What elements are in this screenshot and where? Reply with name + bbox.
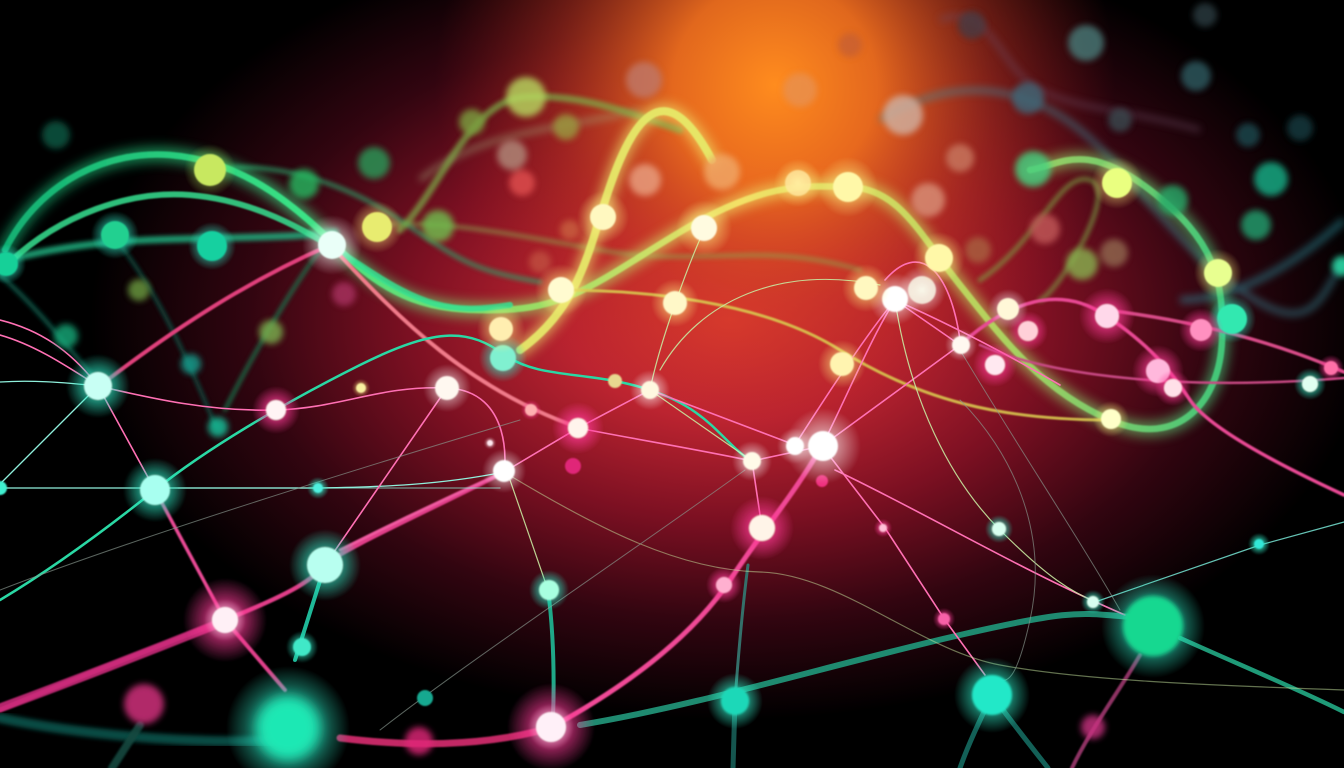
thin web strands: [0, 228, 1344, 730]
pink thick strands: [0, 245, 1344, 768]
bright cyan-white nodes: [0, 211, 1326, 706]
pink nodes: [183, 288, 1344, 768]
ribbon glow: [5, 111, 1222, 429]
large teal nodes: [226, 574, 1205, 768]
main green to yellow ribbon: [5, 111, 1222, 429]
yellow nodes: [184, 144, 1242, 437]
white-hot central nodes: [423, 266, 1028, 493]
blurred far curves, upper right: [420, 16, 1344, 313]
teal lower strands: [0, 336, 1344, 768]
soft green background curves: [0, 97, 1098, 425]
